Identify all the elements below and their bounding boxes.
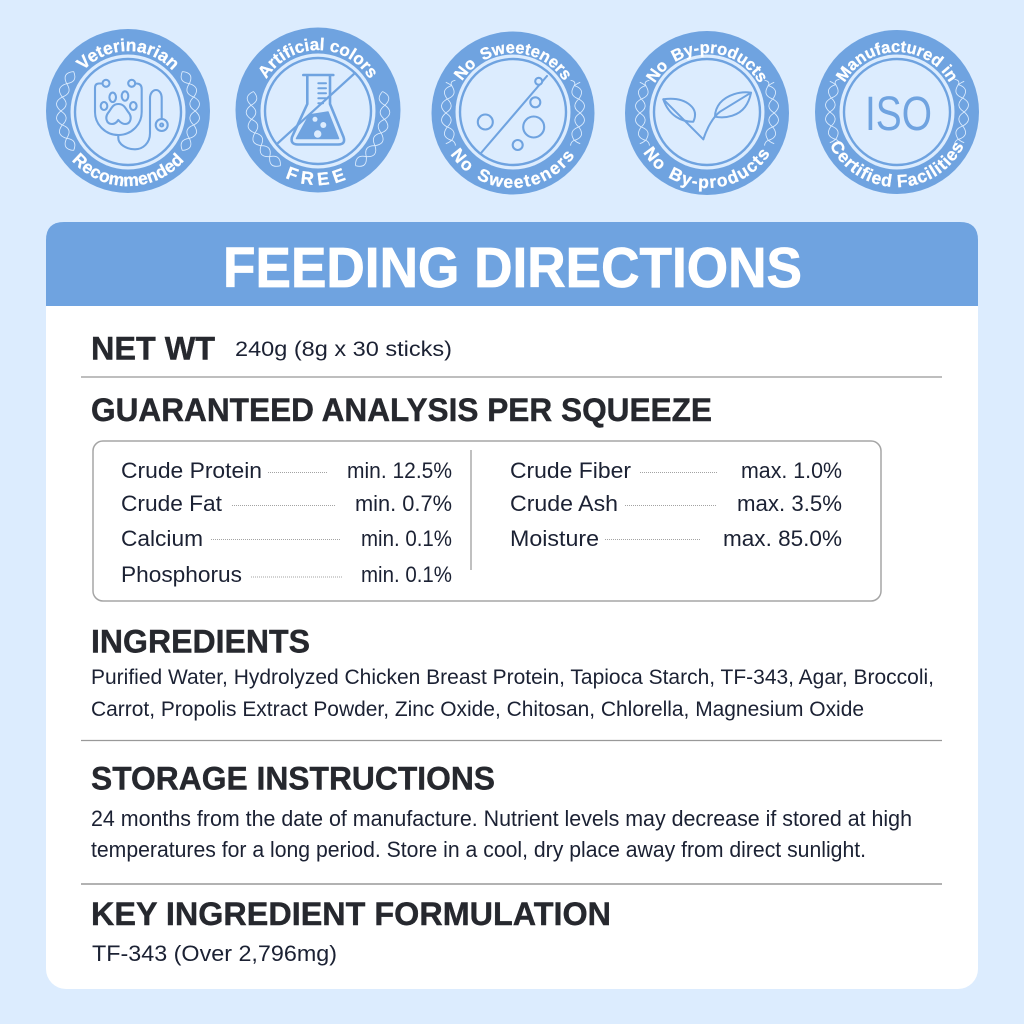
- row: crude fat: [121, 491, 452, 516]
- header band: [46, 222, 978, 306]
- ingredients text: [91, 666, 934, 721]
- icon: crossed out flask: [278, 73, 355, 144]
- row: crude fiber: max. 1.0%: [741, 458, 842, 483]
- row: crude fat: Crude Fat: [121, 491, 222, 516]
- row: crude fat: min. 0.7%: [355, 491, 452, 516]
- row: crude fiber: [510, 458, 842, 483]
- row: crude ash: [510, 491, 842, 516]
- badge: no by-products: No By-products: [643, 146, 769, 192]
- badge: no sweeteners: No Sweeteners: [453, 44, 570, 80]
- icon: stethoscope with paw: [95, 80, 168, 149]
- net weight: NET WT: [91, 330, 215, 366]
- row: crude protein: Crude Protein: [121, 458, 262, 483]
- storage text: temperatures for a long period. Store in a cool, dry place away from direct sunlight.: [91, 837, 866, 862]
- row: crude ash: max. 3.5%: [737, 491, 842, 516]
- badge: manufactured in iso certified facilities: Manufactured in: [836, 41, 956, 82]
- row: crude protein: min. 12.5%: [347, 458, 452, 483]
- icon: iso mark: ISO: [865, 88, 932, 141]
- heading: ingredients: INGREDIENTS: [91, 624, 310, 660]
- key ingredient text: TF-343 (Over 2,796mg): [92, 941, 337, 966]
- row: calcium: Calcium: [121, 526, 203, 551]
- badge: no sweeteners: [432, 32, 594, 194]
- badge: manufactured in iso certified facilities: Certified Facilities: [832, 141, 963, 188]
- row: moisture: max. 85.0%: [723, 526, 842, 551]
- row: phosphorus: min. 0.1%: [361, 562, 452, 587]
- panel: feeding directions: [46, 222, 978, 989]
- badge: veterinarian recommended: Recommended: [72, 152, 184, 186]
- row: calcium: min. 0.1%: [361, 526, 452, 551]
- row: crude fiber: Crude Fiber: [510, 458, 631, 483]
- icon: crossed out bubbles: [478, 76, 547, 153]
- net weight: [91, 330, 452, 366]
- net weight: 240g (8g x 30 sticks): [235, 338, 452, 361]
- badge: artificial colors free: Artificial colors: [259, 38, 376, 79]
- heading: key ingredient formulation: KEY INGREDIENT FORMULATION: [91, 896, 611, 932]
- badge: no sweeteners: No Sweeteners: [450, 148, 574, 188]
- storage text: 24 months from the date of manufacture. Nutrient levels may decrease if stored at high: [91, 806, 912, 831]
- row: crude protein: [121, 458, 452, 483]
- badge: artificial colors free: [236, 28, 400, 192]
- row: phosphorus: [121, 562, 452, 587]
- row: phosphorus: Phosphorus: [121, 562, 242, 587]
- row: moisture: Moisture: [510, 526, 599, 551]
- badge: no by-products: No By-products: [646, 44, 766, 83]
- badge: manufactured in iso certified facilities: [815, 30, 979, 194]
- row: crude ash: Crude Ash: [510, 491, 618, 516]
- heading: guaranteed analysis: GUARANTEED ANALYSIS PER SQUEEZE: [91, 392, 712, 428]
- badge: veterinarian recommended: Veterinarian: [75, 38, 178, 70]
- badge: artificial colors free: FREE: [286, 166, 346, 186]
- ingredients text: Carrot, Propolis Extract Powder, Zinc Oxide, Chitosan, Chlorella, Magnesium Oxide: [91, 698, 864, 721]
- analysis table: [93, 441, 881, 601]
- storage text: [91, 806, 912, 862]
- title: FEEDING DIRECTIONS: [223, 236, 802, 300]
- badge: no by-products: [625, 31, 789, 195]
- ingredients text: Purified Water, Hydrolyzed Chicken Breast Protein, Tapioca Starch, TF-343, Agar, Broccoli,: [91, 666, 934, 689]
- icon: leaves: [663, 92, 751, 139]
- heading: storage instructions: STORAGE INSTRUCTIONS: [91, 760, 495, 796]
- row: moisture: [510, 526, 842, 551]
- badge: veterinarian recommended: [46, 29, 210, 193]
- row: calcium: [121, 526, 452, 551]
